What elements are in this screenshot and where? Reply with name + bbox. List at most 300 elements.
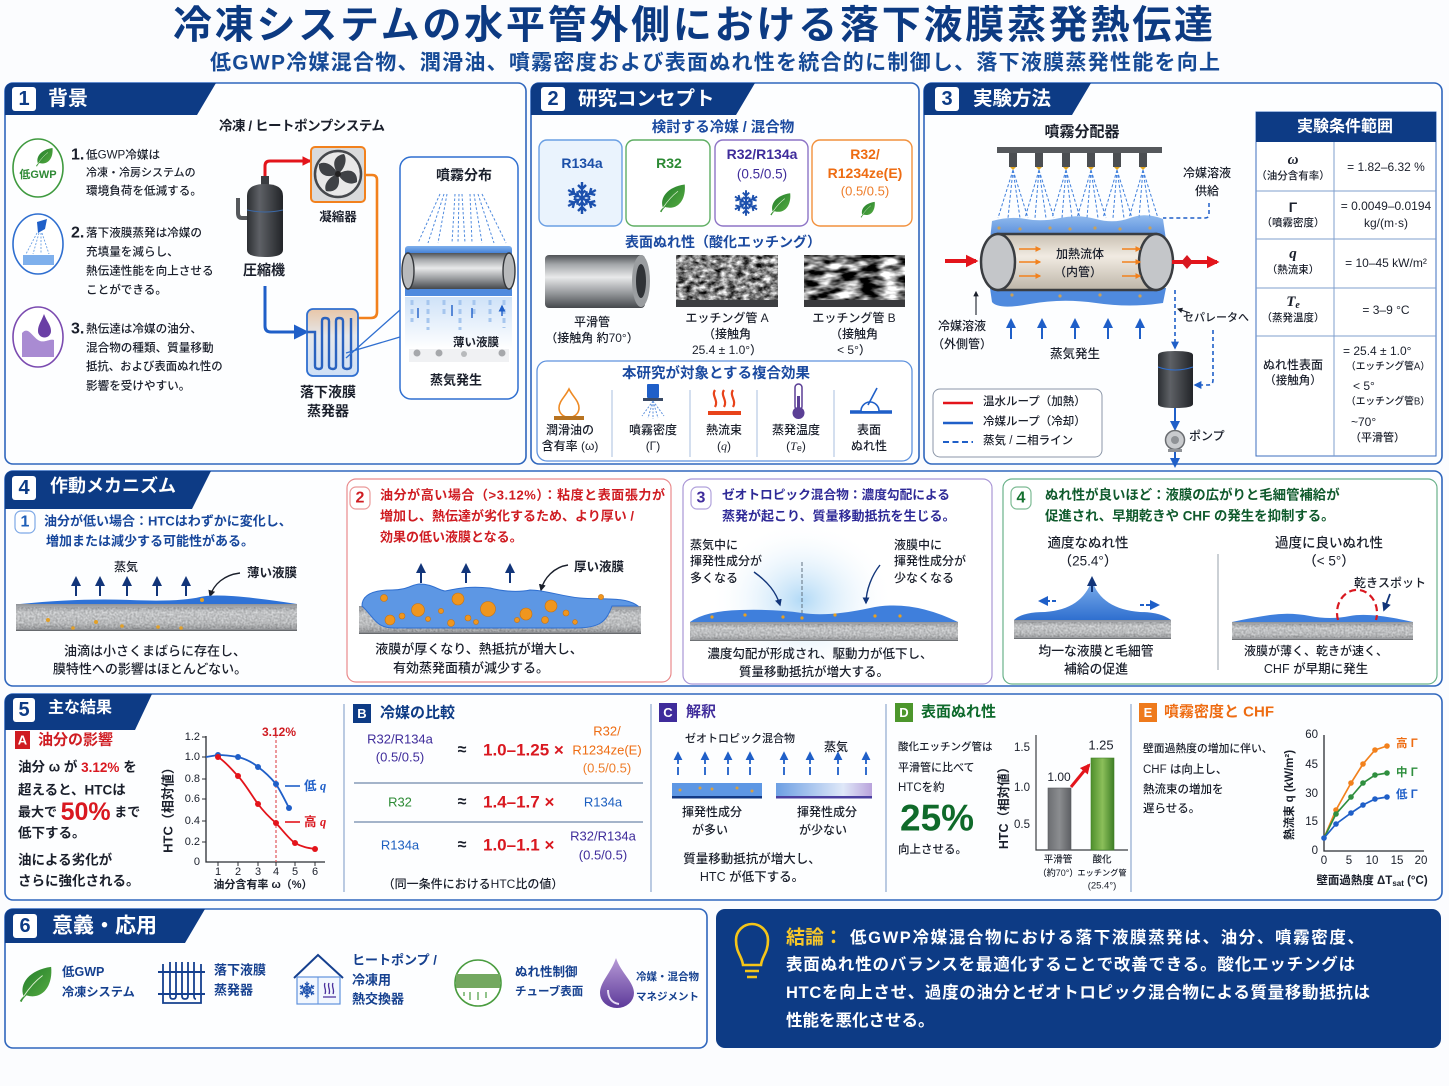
A: oil effect: 最大で 50% まで [18,798,140,826]
chart: heat flux vs superheat: sat [1392,878,1404,888]
B: refrigerant comparison: ≈ [458,794,467,810]
system heading: 冷凍 / ヒートポンプシステム [219,118,385,134]
section header: 意義・応用: 意義・応用 [52,914,157,938]
panel: spray distribution [400,157,518,399]
B: refrigerant comparison: 1.0–1.1 × [483,836,554,854]
chart: heat flux vs superheat [1282,729,1428,888]
dividers [344,704,1131,892]
text: point 1: 冷凍・冷房システムの [86,165,196,179]
coolant feed label: 供給 [1195,184,1219,198]
conclusion text: 低GWP冷媒混合物における落下液膜蒸発は、油分、噴霧密度、 [850,928,1364,947]
text: point 3: 3. [71,320,84,338]
coolant feed label: 冷媒溶液 [1183,165,1231,180]
D: surface wettability: 向上させる。 [898,842,967,856]
caption: smooth tube: （接触角 約70°） [545,330,639,345]
table: experimental ranges: q [1289,246,1297,262]
B: refrigerant comparison: R32 [388,794,412,810]
E: spray density and CHF: CHF は向上し、 [1143,762,1227,776]
B: refrigerant comparison: (0.5/0.5) [376,750,424,764]
panel background [716,909,1441,1048]
application: heat pump: 熱交換器 [352,992,404,1006]
mechanism 3: zeotropic: 揮発性成分が [894,553,966,568]
chart: HTC vs oil content: 低 q [304,778,326,793]
mechanism 3: zeotropic: 揮発性成分が [690,553,762,568]
section header: 背景: 背景 [48,87,88,110]
C: interpretation: が多い [692,822,728,837]
mechanism 3: zeotropic: ゼオトロピック混合物：濃度勾配による [722,487,950,502]
section header: 主な結果: 5 [18,699,30,721]
text: point 3: 抵抗、および表面ぬれ性の [86,359,223,373]
chart: HTC vs oil content: HTC（相対値） [160,761,176,853]
panel: 4 operating mechanism [5,471,1442,686]
chart: HTC vs oil content: 1.0 [185,751,200,763]
B: refrigerant comparison [353,704,643,891]
icon: low GWP [13,139,63,197]
chart: heat flux vs superheat: 壁面過熱度 ΔT [1316,875,1392,887]
icon: spray [13,214,63,274]
card: R32 [626,140,710,226]
return line [1195,330,1213,385]
liquid film on tube [990,215,1166,307]
chart: HTC by tube: (25.4°) [1088,880,1116,892]
D: surface wettability: 酸化エッチング管は [898,740,993,753]
text: point 1: 低GWP冷媒は [86,148,160,162]
mechanism 3: zeotropic: 多くなる [690,570,738,585]
table: experimental ranges: 実験条件範囲 [1297,116,1393,136]
chart: HTC vs oil content: 2 [235,866,241,878]
panel: 3 experimental method [924,83,1442,466]
chart: heat flux vs superheat: 0 [1321,855,1327,867]
B: refrigerant comparison: 冷媒の比較 [380,704,455,722]
table: experimental ranges: = 10–45 kW/m² [1345,256,1427,270]
image: etched tube B [804,255,905,307]
outer tube label: 冷媒溶液 [938,318,986,333]
mechanism 2: high oil: 増加し、熱伝達が劣化するため、より厚い / [380,508,634,524]
vapor arrows [1011,320,1140,339]
panel: 1 background [5,83,526,464]
text: point 3: 混合物の種類、質量移動 [86,340,214,354]
table: experimental ranges: ω [1288,152,1299,168]
E: spray density and CHF: E [1144,705,1153,720]
application: refrigerant management: マネジメント [636,991,699,1003]
B: refrigerant comparison: B [357,706,367,721]
chart: HTC vs oil content: 6 [312,866,318,878]
section header: 研究コンセプト: 研究コンセプト [578,88,715,110]
card: R32/R134a [715,140,808,226]
card: R134a [539,140,622,226]
mechanism 2: high oil: 効果の低い液膜となる。 [380,530,523,544]
panel: combined effects: 含有率 (ω) [542,438,598,453]
caption: tube A: （接触角 [703,326,751,341]
table: experimental ranges: < 5° [1353,379,1375,393]
chart: HTC vs oil content: 0.4 [185,815,200,827]
panel: spray distribution: 薄い液膜 [453,335,499,349]
caption: smooth tube: 平滑管 [574,314,610,329]
subtitle: 低GWP冷媒混合物、潤滑油、噴霧密度および表面ぬれ性を統合的に制御し、落下液膜蒸発性能を向上 [210,52,1220,74]
chart: heat flux vs superheat: 10 [1366,855,1378,867]
chart: HTC vs oil content: 1 [215,866,221,878]
mechanism 3: zeotropic: 蒸気中に [690,537,738,552]
chart: HTC vs oil content: 5 [292,866,298,878]
icon: light bulb [736,924,768,977]
B: refrigerant comparison: R32/R134a [367,732,434,746]
caption: tube A [685,310,769,357]
E: spray density and CHF: 壁面過熱度の増加に伴い、 [1143,741,1273,755]
chart: heat flux vs superheat: 0 [1312,845,1318,857]
mechanism 3: zeotropic: 液膜中に [894,537,942,552]
table: experimental ranges [1256,112,1436,456]
chart: heat flux vs superheat: 30 [1305,788,1318,800]
application: low GWP: 冷凍システム [62,984,135,999]
mechanism 3: zeotropic: 3 [697,490,706,506]
icon: falling film evaporator [307,309,358,376]
application: wetting control: チューブ表面 [515,984,583,998]
chart: HTC by tube: HTC（相対値） [996,761,1011,849]
panel frame [5,909,707,1048]
panel frame [924,83,1442,464]
C: interpretation: が少ない [799,822,847,837]
chart: HTC by tube: 1.25 [1088,738,1114,752]
panel: combined effects: 噴霧密度 [629,422,677,437]
panel: combined effects: (q) [717,439,731,453]
mechanism 4: wettability: 補給の促進 [1064,662,1128,676]
chart: heat flux vs superheat: 中 Γ [1396,765,1418,779]
chart: HTC vs oil content [160,725,326,891]
panel: combined effects [537,361,912,461]
section header: 背景: 1 [18,88,30,110]
spray distributor label: 噴霧分配器 [1044,122,1120,140]
mechanism 4: wettability: （< 5°） [1303,554,1355,568]
card: R32/R134a: (0.5/0.5) [737,166,787,182]
panel: combined effects: e [797,443,802,453]
chart: heat flux vs superheat: 60 [1305,729,1318,741]
coolant feed label [1183,165,1231,198]
panel frame [5,83,526,464]
card: R32/R134a: R32/R134a [727,146,798,162]
table: experimental ranges: = 1.82–6.32 % [1347,160,1425,174]
A: oil effect [15,730,140,888]
mechanism 4: wettability: 乾きスポット [1354,575,1426,590]
conclusion text [786,926,1370,1030]
application: low GWP [20,964,135,1002]
caption: tube B: < 5°） [837,343,871,357]
legend: 温水ループ（加熱） [983,394,1086,408]
A: oil effect: 油による劣化が [18,852,113,868]
wettability heading: 表面ぬれ性（酸化エッチング） [625,234,821,250]
refrigerant heading: 検討する冷媒 / 混合物 [652,118,794,136]
mechanism 4: wettability: CHF が早期に発生 [1264,661,1368,676]
application: falling film evaporator: 落下液膜 [214,962,266,978]
chart: HTC by tube: 酸化 [1092,854,1112,866]
inner tube label: （内管） [1054,264,1102,279]
D: surface wettability: 表面ぬれ性 [921,702,996,720]
mechanism 1: low oil: 増加または減少する可能性がある。 [46,534,254,548]
panel: combined effects: ぬれ性 [851,439,887,453]
table: experimental ranges: （平滑管） [1350,430,1405,444]
section header: 作動メカニズム: 4 [18,477,30,499]
mechanism 2: high oil [347,479,671,682]
E: spray density and CHF: 噴霧密度と CHF [1164,702,1274,720]
card: R32/R1234ze(E): R1234ze(E) [828,165,902,181]
mechanism 3: zeotropic: 蒸発が起こり、質量移動抵抗を生じる。 [722,508,955,524]
chart: HTC by tube: （約70°） [1038,867,1078,878]
D: surface wettability: HTCを約 [898,780,945,794]
spray distributor [997,147,1162,218]
text: point 1: 環境負荷を低減する。 [86,184,202,198]
icon: separator tank [1158,351,1193,408]
chart: HTC vs oil content: 0.8 [185,773,200,785]
B: refrigerant comparison: R32/ [593,724,621,738]
section header: 背景 [5,83,216,115]
C: interpretation: 揮発性成分 [797,804,857,819]
C: interpretation: 質量移動抵抗が増大し、 [683,851,821,866]
outer tube label: （外側管） [932,336,992,351]
D: surface wettability [895,702,996,856]
mechanism 3: zeotropic: 少なくなる [894,570,954,585]
text: point 3 [71,320,223,392]
mechanism 4: wettability: （25.4°） [1059,554,1117,568]
caption: tube B [812,310,896,357]
mechanism 3: zeotropic [683,479,992,684]
application: heat pump: ヒートポンプ / [352,952,437,968]
E: spray density and CHF [1139,702,1274,815]
image: etched tube A [676,255,778,307]
text: point 2: 熱伝達性能を向上させる [86,264,214,278]
icon: pump [1166,430,1184,452]
chart: heat flux vs superheat: (°C) [1404,875,1428,887]
chart: HTC by tube: 1.0 [1014,782,1030,794]
B: refrigerant comparison: R134a [584,794,623,810]
B: refrigerant comparison: 1.4–1.7 × [483,792,554,812]
C: interpretation: HTC が低下する。 [700,869,804,884]
mechanism 1: low oil: 蒸気 [114,559,138,574]
chart: HTC vs oil content: 3.12% [262,725,296,739]
B: refrigerant comparison: R32/R134a [570,828,637,844]
evaporator label: 蒸発器 [307,403,349,419]
section header: 実験方法: 3 [941,88,953,110]
legend: 冷媒ループ（冷却） [983,414,1086,428]
C: interpretation: 蒸気 [824,739,848,754]
B: refrigerant comparison: ≈ [458,742,467,758]
panel: combined effects: 潤滑油の [546,422,594,437]
table: experimental ranges: （熱流束） [1267,263,1319,276]
conclusion text: 表面ぬれ性のバランスを最適化することで改善できる。酸化エッチングは [786,954,1355,974]
chart: HTC vs oil content: 油分含有率 ω（%） [213,877,313,891]
application: refrigerant management: 冷媒・混合物 [636,970,699,983]
pump outlet [1174,452,1176,466]
chart: HTC by tube: エッチング管 [1077,868,1127,878]
panel: 2 research concept [531,83,919,464]
chart: HTC by tube [996,735,1128,892]
application: refrigerant management [600,958,699,1008]
caption: smooth tube [545,314,639,345]
caption: tube A: エッチング管 A [685,310,769,325]
mechanism 1: low oil: 膜特性への影響はほとんどない。 [53,662,247,676]
mechanism 4: wettability: ぬれ性が良いほど：液膜の広がりと毛細管補給が [1045,486,1340,502]
A: oil effect: さらに強化される。 [18,874,140,888]
application: heat pump: 冷凍用 [352,972,391,988]
table: experimental ranges: （蒸発温度） [1262,311,1324,324]
caption: tube A: 25.4 ± 1.0°） [692,343,762,357]
table: experimental ranges: T [1286,294,1295,310]
icon: condenser fan [311,147,365,202]
A: oil effect: 油分 ω が 3.12% を [18,758,137,774]
panel: 5 main results [5,694,1442,900]
text: point 1: 1. [71,146,84,164]
separator label: セパレータへ [1183,311,1249,324]
B: refrigerant comparison: (0.5/0.5) [579,848,627,862]
D: surface wettability: D [899,705,909,720]
panel: combined effects: ) [802,439,806,453]
conclusion text: HTCを向上させ、過度の油分とゼオトロピック混合物による質量移動抵抗は [786,982,1370,1002]
vapor label: 蒸気発生 [1050,346,1100,361]
chart: heat flux vs superheat: 15 [1305,816,1318,828]
mechanism 3: zeotropic: 濃度勾配が形成され、駆動力が低下し、 [707,646,933,661]
panel frame [5,694,1442,900]
image: smooth tube [545,255,650,308]
table: experimental ranges: （噴霧密度） [1262,216,1324,229]
mechanism 4: wettability: 過度に良いぬれ性 [1275,536,1383,550]
text: point 2: 落下液膜蒸発は冷媒の [86,226,202,240]
panel: combined effects: 本研究が対象とする複合効果 [622,364,811,382]
A: oil effect: A [18,732,28,748]
C: interpretation: C [663,705,673,720]
caption: tube B: エッチング管 B [812,310,896,325]
mechanism 4: wettability: 適度なぬれ性 [1048,534,1128,550]
A: oil effect: 低下する。 [18,826,86,840]
table: experimental ranges: ~70° [1351,415,1376,429]
orange condensate pipe [358,175,377,318]
caption: tube B: （接触角 [830,326,878,341]
mechanism 2: high oil: 2 [356,490,365,506]
table: experimental ranges: Γ [1289,199,1298,215]
card: R32/R1234ze(E): (0.5/0.5) [841,184,889,198]
chart: heat flux vs superheat: 低 Γ [1396,787,1418,801]
card: R134a: R134a [561,155,603,171]
card: R32/R1234ze(E) [812,140,912,226]
chart: HTC vs oil content: 高 q [304,814,326,829]
table: experimental ranges: （エッチング管B） [1346,394,1430,408]
evaporator label: 落下液膜 [300,384,356,400]
E: spray density and CHF: 遅らせる。 [1143,802,1200,815]
application: low GWP: 低GWP [62,964,104,979]
section header: 実験方法 [924,83,1091,115]
section header: 研究コンセプト [531,83,755,115]
application: falling film evaporator [158,962,266,1003]
pump line [1174,408,1176,429]
chart: HTC by tube: 平滑管 [1044,854,1073,866]
B: refrigerant comparison: ≈ [458,836,467,854]
C: interpretation [659,703,872,884]
compressor label: 圧縮機 [243,262,285,278]
chart: HTC by tube: 1.5 [1014,742,1030,754]
table: experimental ranges: = 3–9 °C [1362,303,1410,317]
mechanism 4: wettability: 均一な液膜と毛細管 [1038,644,1154,658]
title: 冷凍システムの水平管外側における落下液膜蒸発熱伝達 [173,4,1213,48]
heated tube [981,234,1173,290]
chart: heat flux vs superheat: 15 [1391,855,1403,867]
chart: HTC vs oil content: 3 [255,866,261,878]
chart: HTC vs oil content: 0.2 [185,836,200,848]
blue suction pipe [265,286,306,332]
condenser label: 凝縮器 [319,209,357,224]
D: surface wettability: 平滑管に比べて [898,760,975,774]
red discharge pipe [265,161,310,176]
B: refrigerant comparison: （同一条件におけるHTC比の値） [383,876,563,891]
A: oil effect: 超えると、HTCは [18,782,126,798]
chart: HTC by tube: 1.00 [1047,770,1071,784]
section header: 研究コンセプト: 2 [547,88,559,110]
text: point 2: 充填量を減らし、 [86,244,179,258]
panel: combined effects: (Γ) [646,439,660,453]
feed line [1163,203,1209,218]
icon: low GWP: 低GWP [19,167,57,181]
panel: combined effects: 表面 [857,422,881,437]
chart: heat flux vs superheat: 熱流束 q (kW/m²) [1282,750,1296,840]
inner tube label: 加熱流体 [1056,246,1104,261]
section header: 意義・応用 [5,909,205,943]
mechanism 1: low oil [15,511,298,676]
panel: combined effects: 蒸発温度 [772,422,820,437]
B: refrigerant comparison: 1.0–1.25 × [483,740,564,760]
A: oil effect: 油分の影響 [38,730,113,748]
card: R32/R1234ze(E): R32/ [850,146,880,162]
application: falling film evaporator: 蒸発器 [214,982,253,998]
C: interpretation: 揮発性成分 [682,804,742,819]
text: point 2: 2. [71,224,84,242]
section header: 作動メカニズム: 作動メカニズム [50,475,176,496]
chart: heat flux vs superheat: 20 [1415,855,1427,867]
chart: HTC vs oil content: 4 [273,866,279,878]
legend: 蒸気 / 二相ライン [983,433,1073,447]
table: experimental ranges: = 0.0049–0.0194 [1341,199,1432,213]
mechanism 4: wettability: 促進され、早期乾きや CHF の発生を抑制する。 [1045,508,1335,524]
conclusion text: 性能を悪化させる。 [786,1010,934,1030]
heating arrows [1019,249,1140,276]
text: point 2 [71,224,214,296]
mechanism 4: wettability [1003,479,1437,684]
two-phase line to tank [1174,290,1176,348]
B: refrigerant comparison: R134a [381,838,420,852]
table: experimental ranges: （油分含有率） [1256,169,1330,182]
conclusion text: 結論： [786,926,843,948]
section header: 主な結果: 主な結果 [48,698,112,716]
mechanism 4: wettability: 4 [1017,490,1026,506]
panel: combined effects: (T [786,439,797,453]
chart: HTC vs oil content: 1.2 [185,731,200,743]
C: interpretation: ゼオトロピック混合物 [685,731,795,745]
section header: 主な結果 [5,694,152,730]
mechanism 1: low oil: 油滴は小さくまばらに存在し、 [64,644,246,658]
mechanism 2: high oil: 厚い液膜 [574,559,625,574]
mechanism 1: low oil: 薄い液膜 [247,565,298,580]
evaporator label [300,384,356,419]
icon: compressor [238,176,283,257]
section header: 作動メカニズム [5,471,211,509]
table: experimental ranges: ぬれ性表面 [1263,357,1323,372]
panel frame [5,471,1442,686]
panel: combined effects: 熱流束 [706,422,742,437]
text: point 1 [71,146,202,198]
mechanism 1: low oil: 油分が低い場合：HTCはわずかに変化し、 [44,514,292,528]
text: point 3: 熱伝達は冷媒の油分、 [86,322,202,336]
icon: oil drop [13,307,63,367]
application: heat pump [294,952,437,1006]
chart: heat flux vs superheat: 高 Γ [1396,736,1418,750]
application: wetting control [455,960,583,1006]
card: R32: R32 [656,155,682,171]
table: experimental ranges: （エッチング管A） [1346,360,1430,372]
